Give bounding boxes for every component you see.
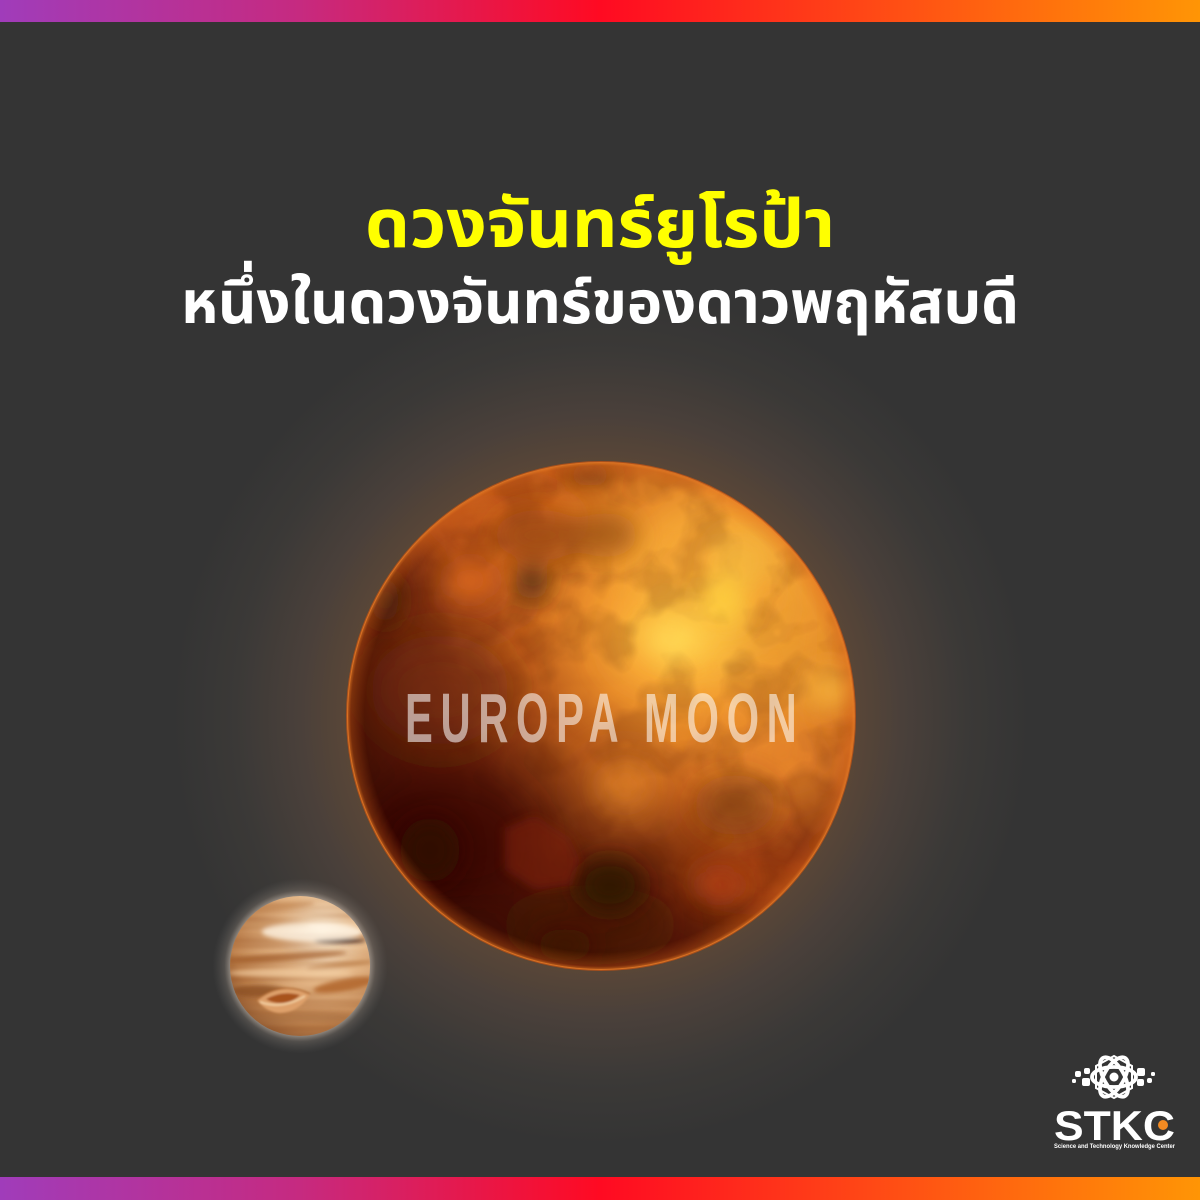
subtitle: หนึ่งในดวงจันทร์ของดาวพฤหัสบดี: [181, 260, 1019, 336]
moon label: EUROPA MOON: [405, 680, 797, 758]
title: ดวงจันทร์ยูโรป้า: [365, 186, 835, 265]
logo tagline: Science and Technology Knowledge Center: [1054, 1144, 1176, 1150]
mottled patches: [419, 464, 852, 912]
illustration: Europa moon: [340, 455, 860, 975]
logo: STKC: [1054, 1053, 1176, 1150]
illustration: Jupiter: [216, 883, 382, 1050]
logo icon: atom: [1092, 1053, 1136, 1101]
bottom gradient bar: [0, 1177, 1200, 1200]
red-brown patch: [505, 815, 580, 890]
top gradient bar: [0, 0, 1200, 22]
bottom-left shadow: [360, 591, 778, 958]
logo wordmark: STKC: [1054, 1102, 1175, 1149]
great red spot: [257, 988, 310, 1013]
moon glow: [171, 286, 1031, 1146]
large tonal areas: [400, 480, 850, 915]
